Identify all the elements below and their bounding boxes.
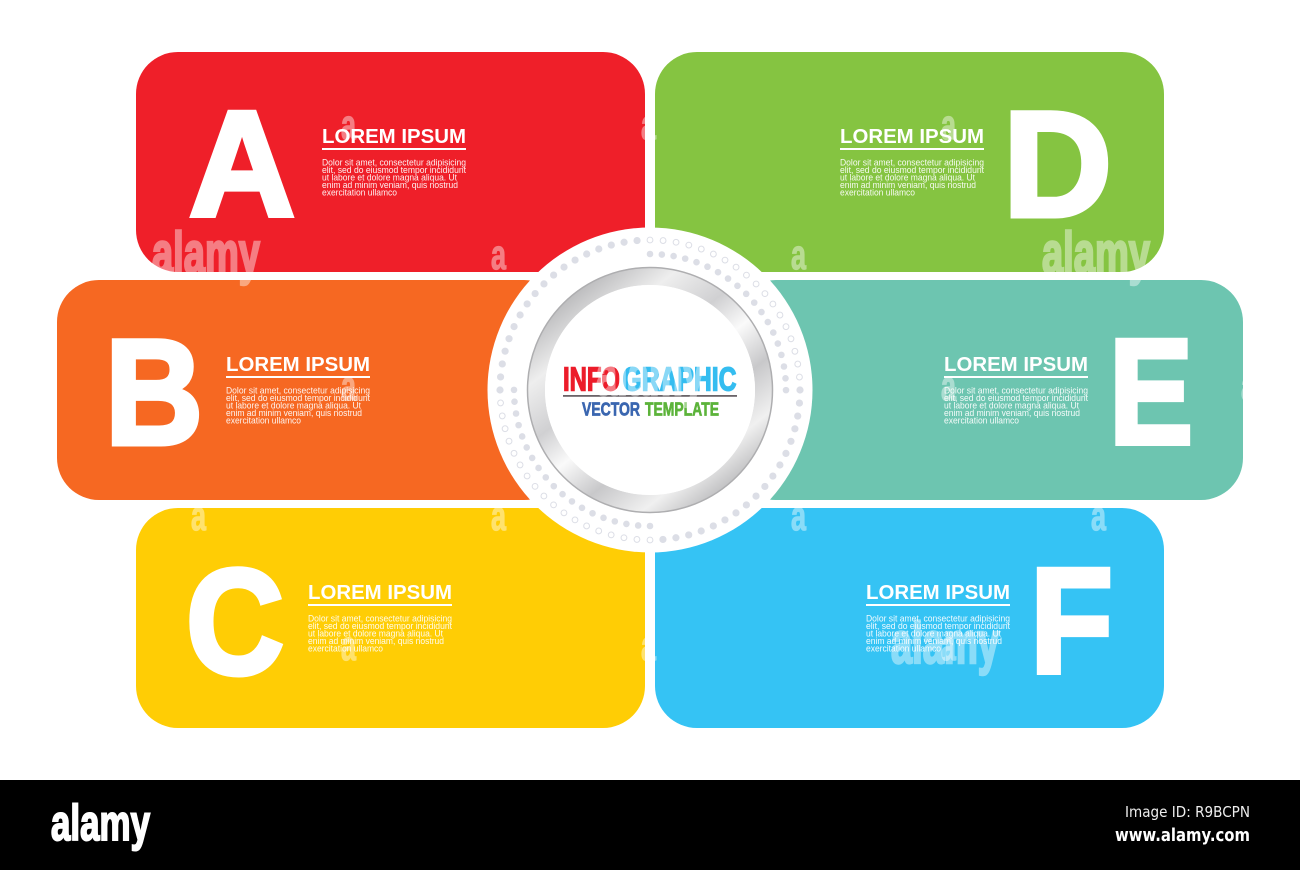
heading F: LOREM IPSUM: [866, 581, 1010, 604]
footer bar: [0, 780, 1300, 870]
letter E: E: [1109, 308, 1193, 476]
text block A: exercitation ullamco: [322, 188, 397, 198]
panel C: [136, 508, 645, 728]
watermarks: a: [491, 492, 506, 539]
watermarks: a: [191, 492, 206, 539]
text block E: exercitation ullamco: [944, 416, 1019, 426]
text block F: Dolor sit amet, consectetur adipisicing: [866, 614, 1010, 624]
text block C: Dolor sit amet, consectetur adipisicing: [308, 614, 452, 624]
text block C: enim ad minim veniam, quis nostrud: [308, 636, 444, 646]
watermarks: a: [941, 362, 956, 409]
watermarks: alamy: [891, 611, 999, 676]
text block D: Dolor sit amet, consectetur adipisicing: [840, 158, 984, 168]
card E: [734, 280, 1243, 500]
letter F: F: [1030, 536, 1113, 704]
text block A: enim ad minim veniam, quis nostrud: [322, 180, 458, 190]
watermarks: a: [341, 362, 356, 409]
text block A: ut labore et dolore magna aliqua. Ut: [322, 172, 457, 182]
VECTOR TEMPLATE subtitle: VECTOR: [582, 400, 640, 420]
white centre: [545, 285, 755, 495]
central badge: [488, 228, 812, 552]
text block C: exercitation ullamco: [308, 644, 383, 654]
text block E: [944, 353, 1088, 426]
text block A: Dolor sit amet, consectetur adipisicing: [322, 158, 466, 168]
dotted rings: [500, 240, 800, 540]
text block E: ut labore et dolore magna aliqua. Ut: [944, 400, 1079, 410]
letter A: A: [189, 80, 295, 248]
watermarks: a: [1241, 362, 1256, 409]
heading A: LOREM IPSUM: [322, 125, 466, 148]
watermarks: alamy: [152, 221, 260, 286]
watermarks: a: [341, 622, 356, 669]
panel E: [734, 280, 1243, 500]
watermarks: alamy: [1042, 221, 1150, 286]
center title: GRAPHIC: [622, 360, 736, 397]
card C: [136, 508, 645, 728]
center title: [563, 360, 737, 420]
text block C: ut labore et dolore magna aliqua. Ut: [308, 628, 443, 638]
text block E: elit, sed do eiusmod tempor incididunt: [944, 393, 1088, 403]
watermarks: a: [641, 101, 656, 148]
watermarks: a: [491, 231, 506, 278]
watermarks: a: [791, 492, 806, 539]
center title: TEMPLATE: [645, 400, 719, 420]
text block D: exercitation ullamco: [840, 188, 915, 198]
letter C: C: [186, 538, 284, 706]
watermarks: a: [641, 622, 656, 669]
text block D: [840, 125, 984, 198]
text block B: ut labore et dolore magna aliqua. Ut: [226, 400, 361, 410]
watermarks: a: [791, 231, 806, 278]
text block C: [308, 581, 452, 654]
text block F: enim ad minim veniam, quis nostrud: [866, 636, 1002, 646]
panel D: [655, 52, 1164, 272]
letter B: B: [105, 308, 203, 476]
text block F: elit, sed do eiusmod tempor incididunt: [866, 621, 1010, 631]
heading C: LOREM IPSUM: [308, 581, 452, 604]
text block D: enim ad minim veniam, quis nostrud: [840, 180, 976, 190]
text block B: enim ad minim veniam, quis nostrud: [226, 408, 362, 418]
heading B: LOREM IPSUM: [226, 353, 370, 376]
text block D: ut labore et dolore magna aliqua. Ut: [840, 172, 975, 182]
website: www.alamy.com: [1115, 825, 1250, 846]
text block F: exercitation ullamco: [866, 644, 941, 654]
card F: [655, 508, 1164, 728]
card B: [57, 280, 566, 500]
watermarks: a: [941, 101, 956, 148]
card D: [655, 52, 1164, 272]
text block B: [226, 353, 370, 426]
text block F: ut labore et dolore magna aliqua. Ut: [866, 628, 1001, 638]
text block C: elit, sed do eiusmod tempor incididunt: [308, 621, 452, 631]
heading E: LOREM IPSUM: [944, 353, 1088, 376]
watermarks: a: [941, 622, 956, 669]
text block B: exercitation ullamco: [226, 416, 301, 426]
metallic ring: [536, 276, 764, 504]
text block E: Dolor sit amet, consectetur adipisicing: [944, 386, 1088, 396]
image id: Image ID: R9BCPN: [1125, 803, 1250, 821]
watermarks: [152, 101, 1256, 676]
watermarks: alamy: [596, 343, 704, 408]
panel A: [136, 52, 645, 272]
text block B: elit, sed do eiusmod tempor incididunt: [226, 393, 370, 403]
letter D: D: [1003, 80, 1112, 248]
text block A: elit, sed do eiusmod tempor incididunt: [322, 165, 466, 175]
footer logo: alamy: [51, 795, 150, 851]
watermarks: a: [1091, 492, 1106, 539]
watermarks: a: [341, 101, 356, 148]
panel F: [655, 508, 1164, 728]
white disc: [488, 228, 812, 552]
heading D: LOREM IPSUM: [840, 125, 984, 148]
text block F: [866, 581, 1010, 654]
text block D: elit, sed do eiusmod tempor incididunt: [840, 165, 984, 175]
text block E: enim ad minim veniam, quis nostrud: [944, 408, 1080, 418]
text block B: Dolor sit amet, consectetur adipisicing: [226, 386, 370, 396]
card A: [136, 52, 645, 272]
INFOGRAPHIC word: INFO: [563, 360, 620, 397]
text block A: [322, 125, 466, 198]
panel B: [57, 280, 566, 500]
